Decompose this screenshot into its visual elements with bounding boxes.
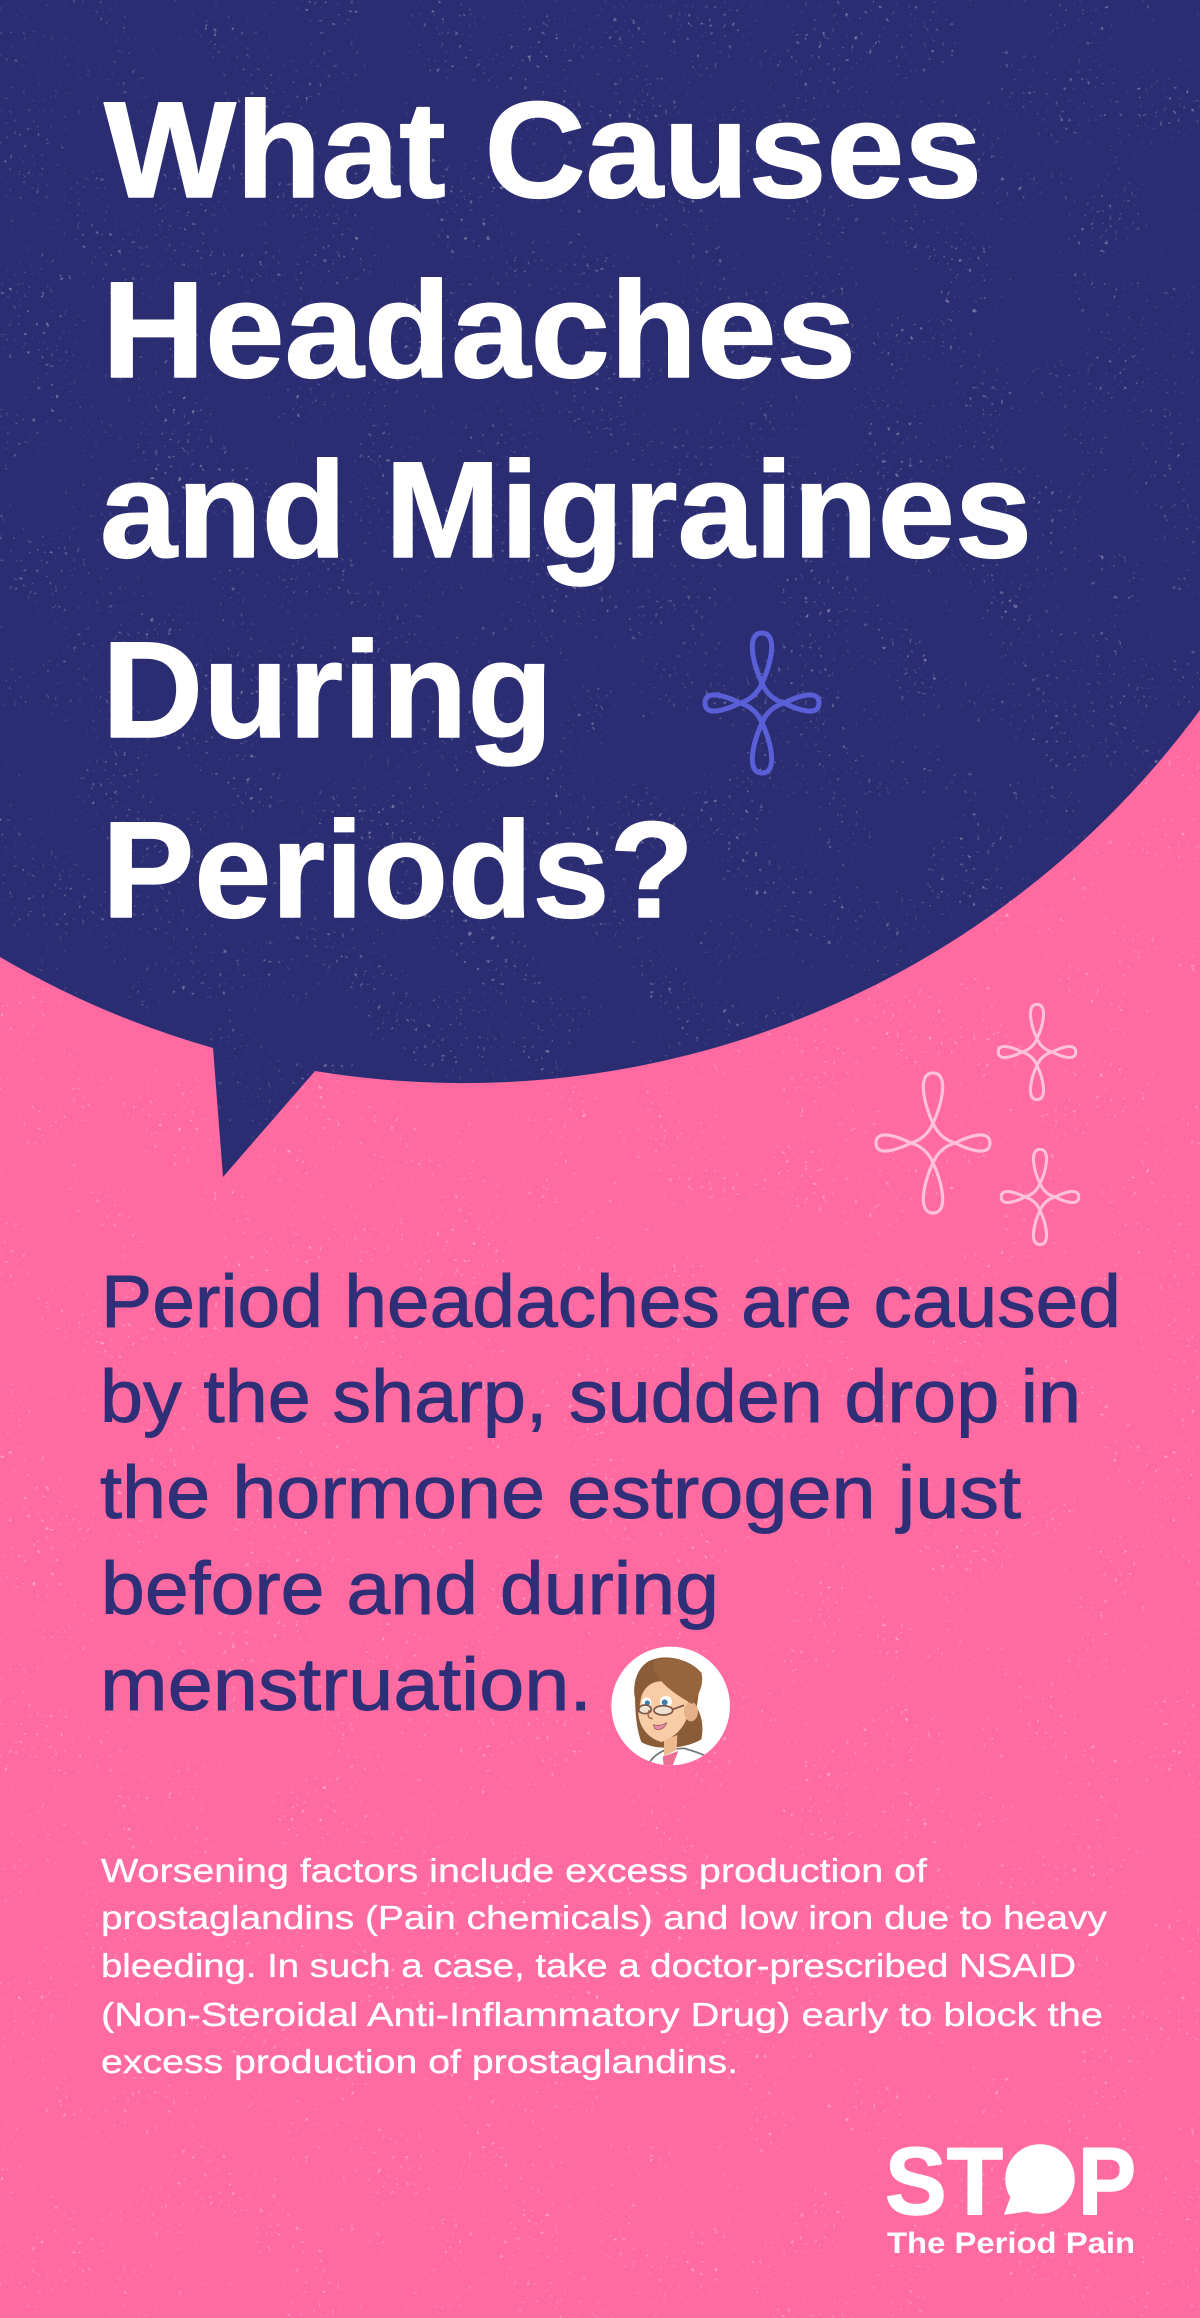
eyes (642, 1697, 651, 1707)
supporting paragraph: (Non-Steroidal Anti-Inflammatory Drug) early to block the (101, 1996, 1103, 2033)
main statement text: by the sharp, sudden drop in (100, 1355, 1081, 1438)
hair fringe (651, 1658, 702, 1704)
glasses (639, 1705, 684, 1715)
title: What Causes (104, 74, 982, 227)
title: Periods? (102, 794, 694, 947)
icon: doctor avatar (611, 1647, 730, 1770)
hair side (651, 1662, 654, 1668)
supporting paragraph (101, 1852, 1108, 2080)
supporting paragraph: excess production of prostaglandins. (101, 2043, 738, 2080)
icon: pink sparkle top (998, 1004, 1076, 1100)
main statement text: Period headaches are caused (101, 1260, 1121, 1343)
hair back (634, 1657, 702, 1748)
navy speech bubble (0, 0, 1200, 1180)
icon: pink sparkle bottom (1001, 1149, 1079, 1245)
mouth (653, 1723, 667, 1730)
logo tagline: The Period Pain (887, 2227, 1135, 2260)
icon: pink sparkle large (876, 1073, 990, 1213)
supporting paragraph: prostaglandins (Pain chemicals) and low iron due to heavy (101, 1899, 1108, 1936)
title (100, 74, 1032, 947)
logo speech-bubble letter O: O (1014, 2138, 1066, 2223)
doctor shirt (662, 1751, 678, 1766)
logo word STOP: ST (885, 2128, 1003, 2235)
main statement text: before and during (101, 1547, 719, 1630)
main statement text (100, 1260, 1121, 1726)
title: and Migraines (100, 434, 1032, 587)
logo word STOP: P (1078, 2128, 1136, 2235)
nose (648, 1710, 653, 1719)
logo: Stop The Period Pain (885, 2128, 1136, 2260)
main statement text: the hormone estrogen just (100, 1451, 1021, 1534)
logo word STOP (885, 2128, 1136, 2235)
icon: blue sparkle (705, 633, 819, 773)
neck (664, 1735, 677, 1756)
supporting paragraph: bleeding. In such a case, take a doctor-prescribed NSAID (101, 1947, 1076, 1984)
ear (684, 1702, 698, 1721)
title: During (102, 614, 553, 767)
face (638, 1681, 689, 1742)
main statement text: menstruation. (100, 1643, 592, 1726)
title: Headaches (102, 254, 856, 407)
doctor coat (649, 1748, 705, 1766)
supporting paragraph: Worsening factors include excess production of (101, 1852, 928, 1889)
